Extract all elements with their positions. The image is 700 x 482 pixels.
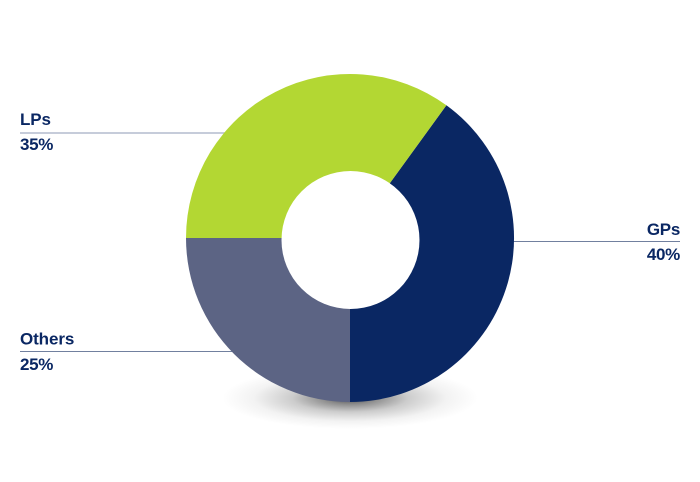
label: GPs 40%: GPs — [647, 220, 680, 239]
label: LPs 35%: 35% — [20, 135, 53, 154]
donut hole — [282, 171, 420, 309]
label: LPs 35% — [20, 110, 226, 154]
label: GPs 40% — [510, 220, 680, 264]
label: GPs 40%: 40% — [647, 245, 680, 264]
label: Others 25%: Others — [20, 330, 74, 348]
segment: Others 25% — [186, 238, 350, 402]
segment: LPs 35% — [186, 74, 446, 238]
segment: GPs 40% — [350, 105, 514, 402]
label: Others 25%: 25% — [20, 355, 53, 374]
label: Others 25% — [20, 330, 236, 374]
drop shadow under donut — [222, 367, 478, 429]
donut — [186, 74, 514, 402]
label: LPs 35%: LPs — [20, 110, 51, 129]
